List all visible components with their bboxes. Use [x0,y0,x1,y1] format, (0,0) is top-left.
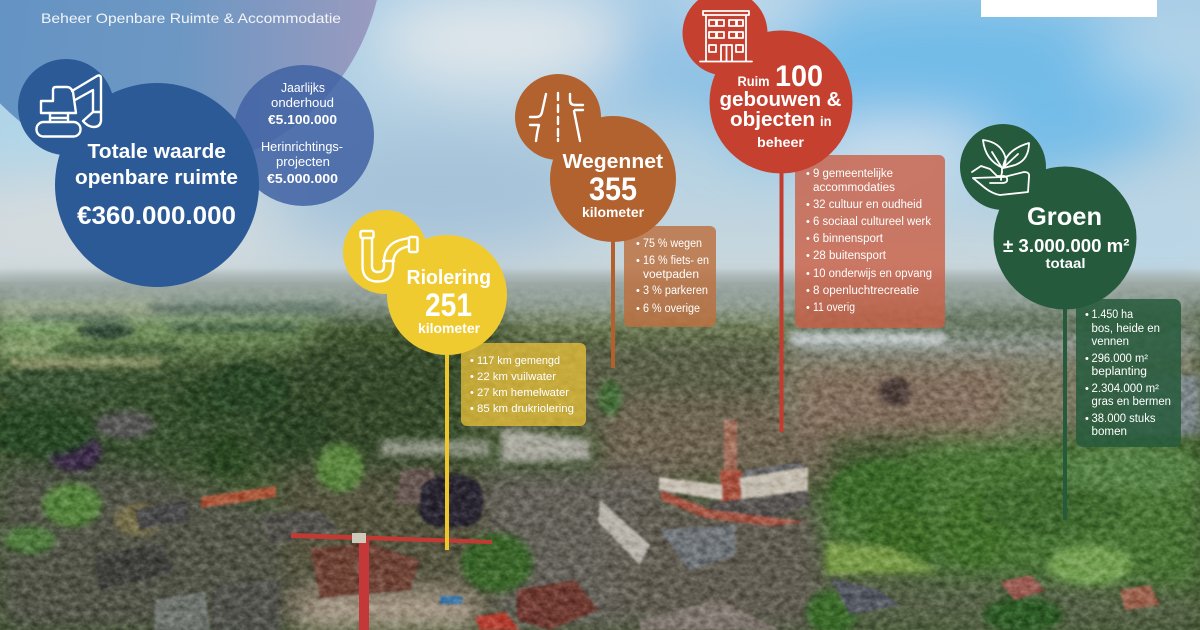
buildings list panel: • [806,268,810,280]
buildings list panel [795,155,945,328]
green section: ± 3.000.000 m² [1003,235,1130,256]
icon: pipe [360,231,418,282]
buildings list panel: 8 openluchtrecreatie [813,285,919,297]
header bubble [0,0,383,171]
value bubble: Totale waarde [88,141,226,163]
value bubble: €360.000.000 [77,202,236,230]
green list panel [1076,299,1181,447]
subtitle: Beheer Openbare Ruimte & Accommodatie [41,10,341,26]
icon: excavator [36,75,101,136]
landscape [0,268,1200,630]
sewer list panel: • [470,371,474,383]
budget bubble: onderhoud [271,96,334,110]
sewer section: kilometer [418,321,481,336]
road list panel: • [636,285,640,297]
buildings section [682,0,945,432]
road list panel: voetpaden [643,269,699,281]
buildings section: objecten [730,108,815,131]
road list panel: 6 % overige [643,303,700,315]
town hall tower and offices [659,420,810,526]
road list panel: • [636,255,640,267]
budget bubble: projecten [276,155,330,169]
road section [515,74,716,368]
sewer list panel: 85 km drukriolering [477,403,574,415]
road section: Wegennet [562,150,663,173]
green list panel: • [1085,309,1089,321]
green section: Groen [1027,203,1102,231]
logo box [981,0,1157,17]
sewer section: Riolering [406,266,491,289]
green list panel: 1.450 ha [1092,309,1134,321]
icon: plant in hand [972,140,1029,195]
value bubble [18,59,259,287]
buildings list panel: • [806,302,810,314]
sewer list panel: • [470,403,474,415]
green list panel: • [1085,413,1089,425]
sewer list panel: 117 km gemengd [477,355,560,367]
green section: totaal [1046,255,1086,271]
buildings section: gebouwen & [720,88,842,111]
buildings list panel: • [806,285,810,297]
green list panel: beplanting [1092,366,1147,378]
sewer section: 251 [425,287,472,323]
budget bubble: €5.100.000 [268,112,337,127]
buildings list panel: accommodaties [813,182,895,194]
icon: building [700,11,752,62]
green list panel: 38.000 stuks [1092,413,1156,425]
road list panel: 16 % fiets- en [643,255,709,267]
buildings list panel: • [806,199,810,211]
sewer section [343,210,586,550]
green list panel: 296.000 m² [1092,353,1148,365]
green list panel: • [1085,383,1089,395]
buildings list panel: 9 gemeentelijke [813,168,893,180]
buildings list panel: 6 binnensport [813,233,884,245]
budget bubble: Herinrichtings- [261,140,343,154]
green list panel: 2.304.000 m² [1092,383,1159,395]
sewer list panel: • [470,387,474,399]
value bubble: openbare ruimte [75,167,238,189]
green list panel: • [1085,353,1089,365]
sewer list panel [461,343,586,426]
sewer list panel: 22 km vuilwater [477,371,556,383]
road section: kilometer [582,205,645,220]
buildings list panel: • [806,250,810,262]
road list panel: 75 % wegen [643,238,702,250]
buildings section: in [820,114,832,129]
sewer list panel: 27 km hemelwater [477,387,569,399]
budget bubble: Jaarlijks [281,81,325,95]
buildings section: 100 [775,60,823,93]
buildings section: beheer [757,134,805,150]
photo texture [0,285,1200,630]
sewer list panel: • [470,355,474,367]
buildings list panel: • [806,168,810,180]
green section [960,124,1181,520]
buildings list panel: • [806,233,810,245]
road list panel: • [636,238,640,250]
church [395,468,482,526]
budget bubble: €5.000.000 [267,171,338,186]
road list panel: 3 % parkeren [643,285,708,297]
budget bubble [233,65,374,206]
road list panel: • [636,303,640,315]
sky [0,0,1200,300]
green list panel: gras en bermen [1092,396,1171,408]
green list panel: vennen [1092,336,1129,348]
buildings list panel: 11 overig [813,302,855,314]
green list panel: bomen [1092,426,1127,438]
buildings list panel: 6 sociaal cultureel werk [813,216,931,228]
buildings list panel: 28 buitensport [813,250,887,262]
buildings list panel: • [806,216,810,228]
green list panel: bos, heide en [1092,323,1160,335]
buildings section: Ruim [738,74,770,89]
buildings list panel: 10 onderwijs en opvang [813,268,932,280]
construction crane [291,533,492,630]
icon: road [530,93,583,141]
road section: 355 [589,171,637,207]
road list panel [624,226,716,327]
buildings list panel: 32 cultuur en oudheid [813,199,922,211]
